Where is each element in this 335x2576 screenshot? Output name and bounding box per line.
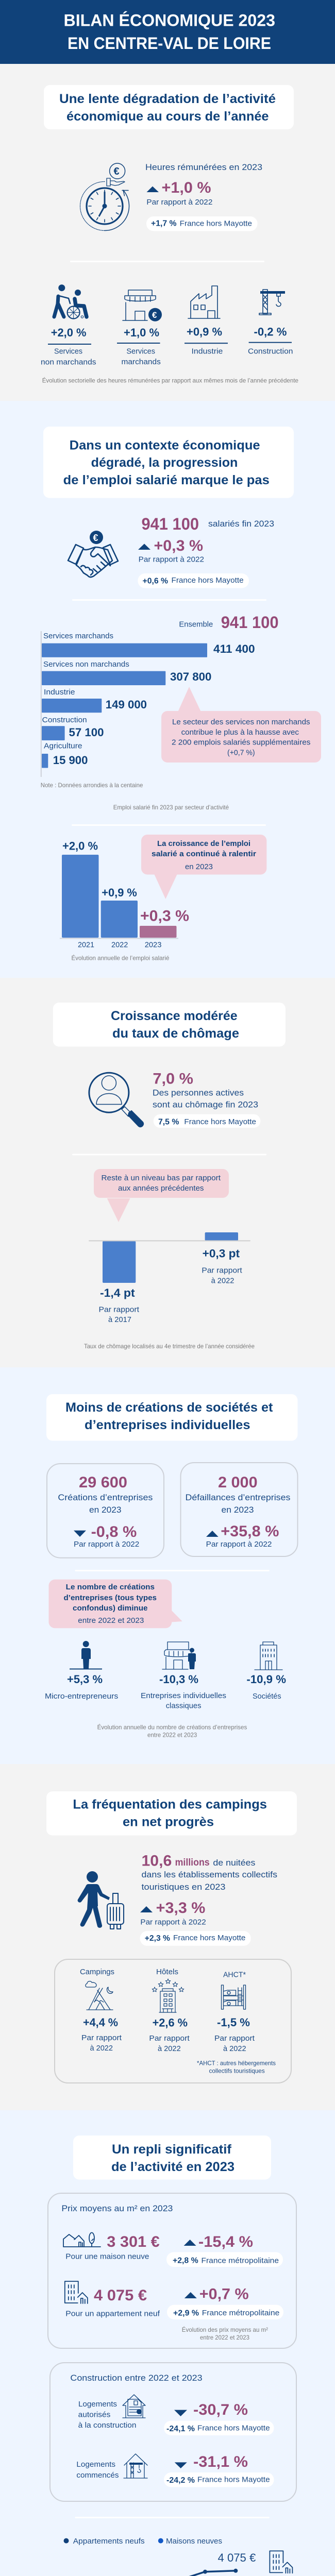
- stat row: sectoral changes: non marchands: [41, 358, 96, 367]
- stat: nuitées: [140, 1852, 277, 1946]
- card: créations d'entreprises: Créations d’entreprises: [58, 1493, 153, 1502]
- card: créations d'entreprises: Par rapport à 2022: [74, 1540, 139, 1549]
- card: construction: France hors Mayotte: [197, 2476, 270, 2484]
- column: hôtels: Hôtels: [156, 1968, 178, 1976]
- card: défaillances d'entreprises: [180, 1463, 298, 1556]
- card: prix moyens: [48, 2193, 296, 2348]
- card: défaillances d'entreprises: +35,8 %: [221, 1523, 279, 1540]
- stat: nuitées: +3,3 %: [156, 1900, 205, 1917]
- stat: taux de chômage: sont au chômage fin 2023: [153, 1099, 258, 1109]
- icon: services non marchands wheelchair: [54, 284, 87, 318]
- source note: chômage: Taux de chômage localisés au 4e trimestre de l’année considérée: [84, 1343, 255, 1350]
- icon: industrie factory: [188, 286, 220, 318]
- chart: variation du taux de chômage: -1,4 pt: [100, 1286, 135, 1299]
- source note: emploi par secteur: Emploi salarié fin 2023 par secteur d’activité: [113, 804, 229, 811]
- chart: emploi par secteur: Services marchands: [43, 632, 113, 640]
- column: hôtels: +2,6 %: [153, 2016, 188, 2029]
- callout: nombre de créations: Le nombre de créations: [66, 1583, 155, 1591]
- source note: heures: Évolution sectorielle des heures rémunérées par rapport aux mêmes mois de l’année précédente: [42, 377, 298, 384]
- chart: évolution annuelle emploi: +2,0 %: [62, 840, 98, 853]
- card: construction: commencés: [76, 2471, 119, 2480]
- card: construction: autorisés: [78, 2410, 110, 2419]
- panel: chômage: [0, 978, 335, 1367]
- callout: nombre de créations: confondus) diminue: [73, 1604, 147, 1613]
- heading: campings: en net progrès: [123, 1815, 214, 1829]
- chart: emploi par secteur: 941 100: [221, 613, 279, 632]
- title: EN CENTRE-VAL DE LOIRE: [68, 34, 271, 53]
- source note: créations: [97, 1723, 247, 1739]
- chart: emploi par secteur: [41, 613, 279, 777]
- column: AHCT: Par rapport: [214, 2034, 255, 2043]
- callout: services non marchands: [161, 687, 321, 762]
- stat: taux de chômage: 7,0 %: [153, 1071, 193, 1087]
- panel: emploi salarié: [0, 401, 335, 978]
- chart: emploi par secteur: 411 400: [213, 642, 255, 655]
- stat row: sectoral changes: Construction: [248, 347, 293, 355]
- panel: activité économique: [0, 64, 335, 401]
- callout: nombre de créations: d’entreprises (tous types: [64, 1594, 157, 1602]
- title: BILAN ÉCONOMIQUE 2023: [64, 11, 275, 30]
- stat: salariés: salariés fin 2023: [208, 519, 274, 529]
- card: défaillances d'entreprises: Par rapport à 2022: [206, 1540, 272, 1549]
- column: campings: à 2022: [90, 2044, 113, 2053]
- chart: emploi par secteur: 57 100: [69, 726, 104, 739]
- column: campings: +4,4 %: [83, 2016, 118, 2029]
- card: construction: Construction entre 2022 et 2023: [70, 2373, 203, 2383]
- panel: fréquentation touristique: [0, 1764, 335, 2110]
- callout: services non marchands: 2 200 emplois salariés supplémentaires: [172, 738, 310, 747]
- chart: emploi par secteur: Construction: [42, 716, 87, 724]
- stat: taux de chômage: Des personnes actives: [153, 1088, 244, 1097]
- card: défaillances d'entreprises: Défaillances d’entreprises: [186, 1493, 290, 1502]
- panel: entreprises: [0, 1367, 335, 1764]
- source note: évolution emploi: Évolution annuelle de l’emploi salarié: [71, 954, 170, 961]
- card: créations d'entreprises: 29 600: [79, 1474, 127, 1491]
- chart: prix moyens au m² line chart: [37, 2537, 306, 2576]
- callout: croissance de l'emploi: en 2023: [185, 862, 213, 871]
- card: créations d'entreprises: en 2023: [89, 1505, 122, 1515]
- callout: nombre de créations: entre 2022 et 2023: [78, 1616, 144, 1625]
- stat: nuitées: de nuitées: [213, 1858, 255, 1868]
- column: campings: Campings: [80, 1968, 114, 1976]
- column: campings: [80, 1968, 122, 2053]
- icon: maison: [63, 2233, 100, 2247]
- stat: taux de chômage: [153, 1071, 260, 1128]
- heading: repli: Un repli significatif: [112, 2142, 232, 2157]
- stat: heures rémunérées: France hors Mayotte: [180, 219, 252, 228]
- legend: line chart: Maisons neuves: [166, 2537, 222, 2546]
- icon: traveller with suitcase: [78, 1871, 124, 1929]
- card: prix moyens: +2,9 %: [173, 2309, 199, 2318]
- heading: emploi: dégradé, la progression: [91, 455, 238, 470]
- heading: entreprises: [46, 1394, 298, 1440]
- icon: appartement: [65, 2281, 88, 2303]
- stat: salariés: Par rapport à 2022: [139, 555, 204, 564]
- stat: salariés: France hors Mayotte: [171, 576, 244, 585]
- note: arrondis: Note : Données arrondies à la centaine: [41, 782, 143, 789]
- note: évolution des prix: [182, 2326, 268, 2341]
- card: prix moyens: Pour une maison neuve: [65, 2252, 149, 2261]
- heading: chômage: du taux de chômage: [112, 1026, 239, 1041]
- icon: services marchands shop: €: [152, 310, 157, 320]
- panel: page header: [0, 0, 335, 64]
- heading: activité: Une lente dégradation de l’activité: [59, 92, 276, 106]
- stat: taux de chômage: 7,5 %: [158, 1118, 179, 1127]
- icon: house with crane: [124, 2454, 147, 2478]
- footnote: AHCT: *AHCT : autres hébergements: [197, 2060, 276, 2067]
- chart: emploi par secteur: 149 000: [106, 698, 147, 711]
- chart: évolution annuelle emploi: [60, 840, 189, 949]
- heading: chômage: Croissance modérée: [111, 1009, 238, 1023]
- callout: niveau bas: aux années précédentes: [118, 1184, 204, 1193]
- callout: niveau bas: [94, 1169, 229, 1222]
- chart: évolution annuelle emploi: 2022: [111, 940, 128, 949]
- legend: line chart: [64, 2537, 222, 2546]
- chart: variation du taux de chômage: [89, 1232, 250, 1324]
- stat: sociétés: [246, 1642, 286, 1701]
- stat: sociétés: -10,9 %: [246, 1673, 286, 1686]
- stat: nuitées: Par rapport à 2022: [140, 1918, 206, 1927]
- card: prix moyens: Prix moyens au m² en 2023: [61, 2204, 173, 2213]
- card: créations d'entreprises: -0,8 %: [91, 1523, 137, 1540]
- stat: entreprises individuelles classiques: [141, 1642, 226, 1710]
- stat row: sectoral changes: -0,2 %: [254, 326, 287, 338]
- chart: emploi par secteur: Agriculture: [44, 742, 82, 751]
- callout: croissance de l'emploi: [141, 835, 266, 899]
- column: hôtels: Par rapport: [149, 2034, 190, 2043]
- heading: entreprises: d’entreprises individuelles: [85, 1418, 250, 1432]
- callout: croissance de l'emploi: La croissance de l’emploi: [157, 839, 250, 848]
- heading: emploi: Dans un contexte économique: [70, 438, 260, 452]
- card: prix moyens: 3 301 €: [107, 2233, 160, 2250]
- card: créations d'entreprises: [47, 1464, 164, 1558]
- icon: appartement (chart): [270, 2551, 292, 2573]
- chart: évolution annuelle emploi: +0,9 %: [102, 886, 137, 899]
- footnote: AHCT: [197, 2060, 276, 2075]
- chart: variation du taux de chômage: +0,3 pt: [203, 1247, 240, 1260]
- icon: house with permit document: [123, 2395, 145, 2418]
- card: prix moyens: -15,4 %: [198, 2233, 253, 2250]
- card: types d'hébergement: [55, 1959, 291, 2083]
- icon: stopwatch with euro coin: [80, 163, 129, 231]
- stat: nuitées: France hors Mayotte: [173, 1934, 245, 1942]
- callout: services non marchands: contribue le plus à la hausse avec: [181, 728, 299, 737]
- column: AHCT: AHCT*: [223, 1970, 246, 1979]
- chart: emploi par secteur: 15 900: [53, 754, 88, 767]
- column: AHCT: [214, 1970, 255, 2053]
- heading: entreprises: Moins de créations de sociétés et: [65, 1400, 273, 1415]
- stat row: sectoral changes: Services: [54, 347, 82, 355]
- card: prix moyens: France métropolitaine: [201, 2257, 279, 2265]
- chart: emploi par secteur: Ensemble: [179, 620, 213, 629]
- stat row: sectoral changes: Industrie: [192, 347, 223, 355]
- stat: entreprises individuelles classiques: classiques: [166, 1702, 201, 1710]
- card: construction: -24,2 %: [166, 2476, 195, 2485]
- column: AHCT: à 2022: [223, 2044, 246, 2053]
- card: construction: Logements: [78, 2400, 117, 2409]
- callout: services non marchands: Le secteur des services non marchands: [172, 718, 310, 726]
- card: construction: France hors Mayotte: [197, 2424, 270, 2432]
- stat: salariés: [138, 515, 274, 588]
- card: construction: -30,7 %: [193, 2401, 248, 2418]
- card: prix moyens: +0,7 %: [199, 2285, 249, 2303]
- stat: salariés: +0,6 %: [142, 577, 168, 586]
- note: évolution des prix: Évolution des prix moyens au m²: [182, 2326, 268, 2333]
- stat: micro-entrepreneurs: [45, 1641, 118, 1701]
- card: construction: [50, 2363, 296, 2501]
- stat: nuitées: dans les établissements collectifs: [141, 1870, 277, 1879]
- card: construction: -31,1 %: [193, 2453, 248, 2470]
- chart: évolution annuelle emploi: 2021: [78, 940, 94, 949]
- stat: nuitées: 10,6: [141, 1852, 172, 1869]
- column: AHCT: -1,5 %: [217, 2016, 250, 2029]
- card: défaillances d'entreprises: en 2023: [222, 1505, 254, 1515]
- stat: entreprises individuelles classiques: -10,3 %: [159, 1673, 198, 1686]
- footnote: AHCT: collectifs touristiques: [209, 2067, 265, 2075]
- heading: repli: [73, 2136, 271, 2180]
- stat: micro-entrepreneurs: Micro-entrepreneurs: [45, 1692, 118, 1701]
- source note: créations: entre 2022 et 2023: [147, 1732, 197, 1739]
- card: prix moyens: France métropolitaine: [202, 2309, 279, 2317]
- card: prix moyens: +2,8 %: [173, 2257, 198, 2265]
- stat row: sectoral changes: Services: [126, 347, 155, 355]
- stat row: sectoral changes: +2,0 %: [51, 326, 87, 339]
- chart: emploi par secteur: Services non marchands: [43, 660, 129, 669]
- chart: évolution annuelle emploi: +0,3 %: [140, 908, 189, 924]
- stat: heures rémunérées: +1,7 %: [151, 219, 176, 228]
- stat: taux de chômage: France hors Mayotte: [184, 1117, 256, 1126]
- column: hôtels: à 2022: [158, 2044, 181, 2053]
- stat: micro-entrepreneurs: +5,3 %: [67, 1673, 103, 1686]
- card: construction: Logements: [76, 2460, 115, 2469]
- stat: heures rémunérées: [145, 162, 262, 231]
- chart: emploi par secteur: Industrie: [44, 688, 75, 697]
- heading: campings: La fréquentation des campings: [73, 1797, 267, 1811]
- icon: construction crane: [259, 290, 285, 315]
- chart: prix moyens au m² line chart: 4 075 €: [217, 2551, 256, 2564]
- stat: salariés: 941 100: [141, 515, 199, 533]
- stat: entreprises individuelles classiques: Entreprises individuelles: [141, 1691, 226, 1700]
- icon: magnifier with person: [89, 1073, 143, 1127]
- icon: handshake with euro: [68, 531, 118, 577]
- stat: salariés: +0,3 %: [154, 537, 203, 554]
- heading: chômage: [53, 1003, 286, 1047]
- chart: variation du taux de chômage: à 2022: [211, 1276, 234, 1285]
- chart: variation du taux de chômage: à 2017: [108, 1315, 131, 1324]
- source note: créations: Évolution annuelle du nombre de créations d’entreprises: [97, 1723, 247, 1731]
- callout: croissance de l'emploi: salarié a continué à ralentir: [152, 850, 256, 858]
- stat: nuitées: millions: [175, 1857, 210, 1868]
- chart: emploi par secteur: 307 800: [170, 670, 211, 683]
- stat row: sectoral changes: +0,9 %: [187, 326, 222, 338]
- column: campings: Par rapport: [81, 2033, 122, 2042]
- title: [64, 11, 275, 53]
- stat: sociétés: Sociétés: [253, 1692, 281, 1701]
- icon: stopwatch with euro coin: €: [113, 166, 120, 177]
- legend: line chart: Appartements neufs: [73, 2537, 145, 2546]
- stat: heures rémunérées: Par rapport à 2022: [146, 198, 212, 207]
- stat row: sectoral changes: marchands: [122, 358, 161, 366]
- heading: emploi: de l’emploi salarié marque le pas: [63, 473, 270, 487]
- stat: nuitées: touristiques en 2023: [141, 1882, 225, 1892]
- stat: nuitées: +2,3 %: [145, 1934, 170, 1943]
- stat: heures rémunérées: +1,0 %: [162, 179, 211, 196]
- stat row: sectoral changes: [41, 326, 293, 367]
- callout: niveau bas: Reste à un niveau bas par rapport: [101, 1174, 221, 1182]
- callout: nombre de créations: [48, 1580, 182, 1628]
- column: hôtels: [149, 1968, 190, 2053]
- heading: activité: [44, 85, 294, 129]
- icon: handshake with euro: €: [93, 533, 98, 543]
- chart: variation du taux de chômage: Par rapport: [202, 1266, 243, 1275]
- heading: emploi: [43, 427, 294, 498]
- card: construction: à la construction: [78, 2421, 136, 2430]
- card: construction: -24,1 %: [166, 2425, 195, 2433]
- panel: construction et immobilier: [0, 2110, 335, 2576]
- icon: services marchands shop: [123, 290, 162, 321]
- callout: services non marchands: (+0,7 %): [227, 749, 255, 757]
- card: prix moyens: 4 075 €: [94, 2287, 147, 2304]
- card: prix moyens: Pour un appartement neuf: [65, 2309, 160, 2318]
- stat: heures rémunérées: Heures rémunérées en 2023: [145, 162, 262, 172]
- chart: évolution annuelle emploi: 2023: [145, 940, 161, 949]
- heading: repli: de l’activité en 2023: [111, 2160, 234, 2174]
- heading: activité: économique au cours de l’année: [66, 109, 269, 124]
- note: évolution des prix: entre 2022 et 2023: [200, 2334, 249, 2341]
- stat row: sectoral changes: +1,0 %: [124, 326, 159, 339]
- heading: campings: [46, 1791, 297, 1836]
- chart: variation du taux de chômage: Par rapport: [99, 1306, 140, 1314]
- card: défaillances d'entreprises: 2 000: [218, 1474, 258, 1491]
